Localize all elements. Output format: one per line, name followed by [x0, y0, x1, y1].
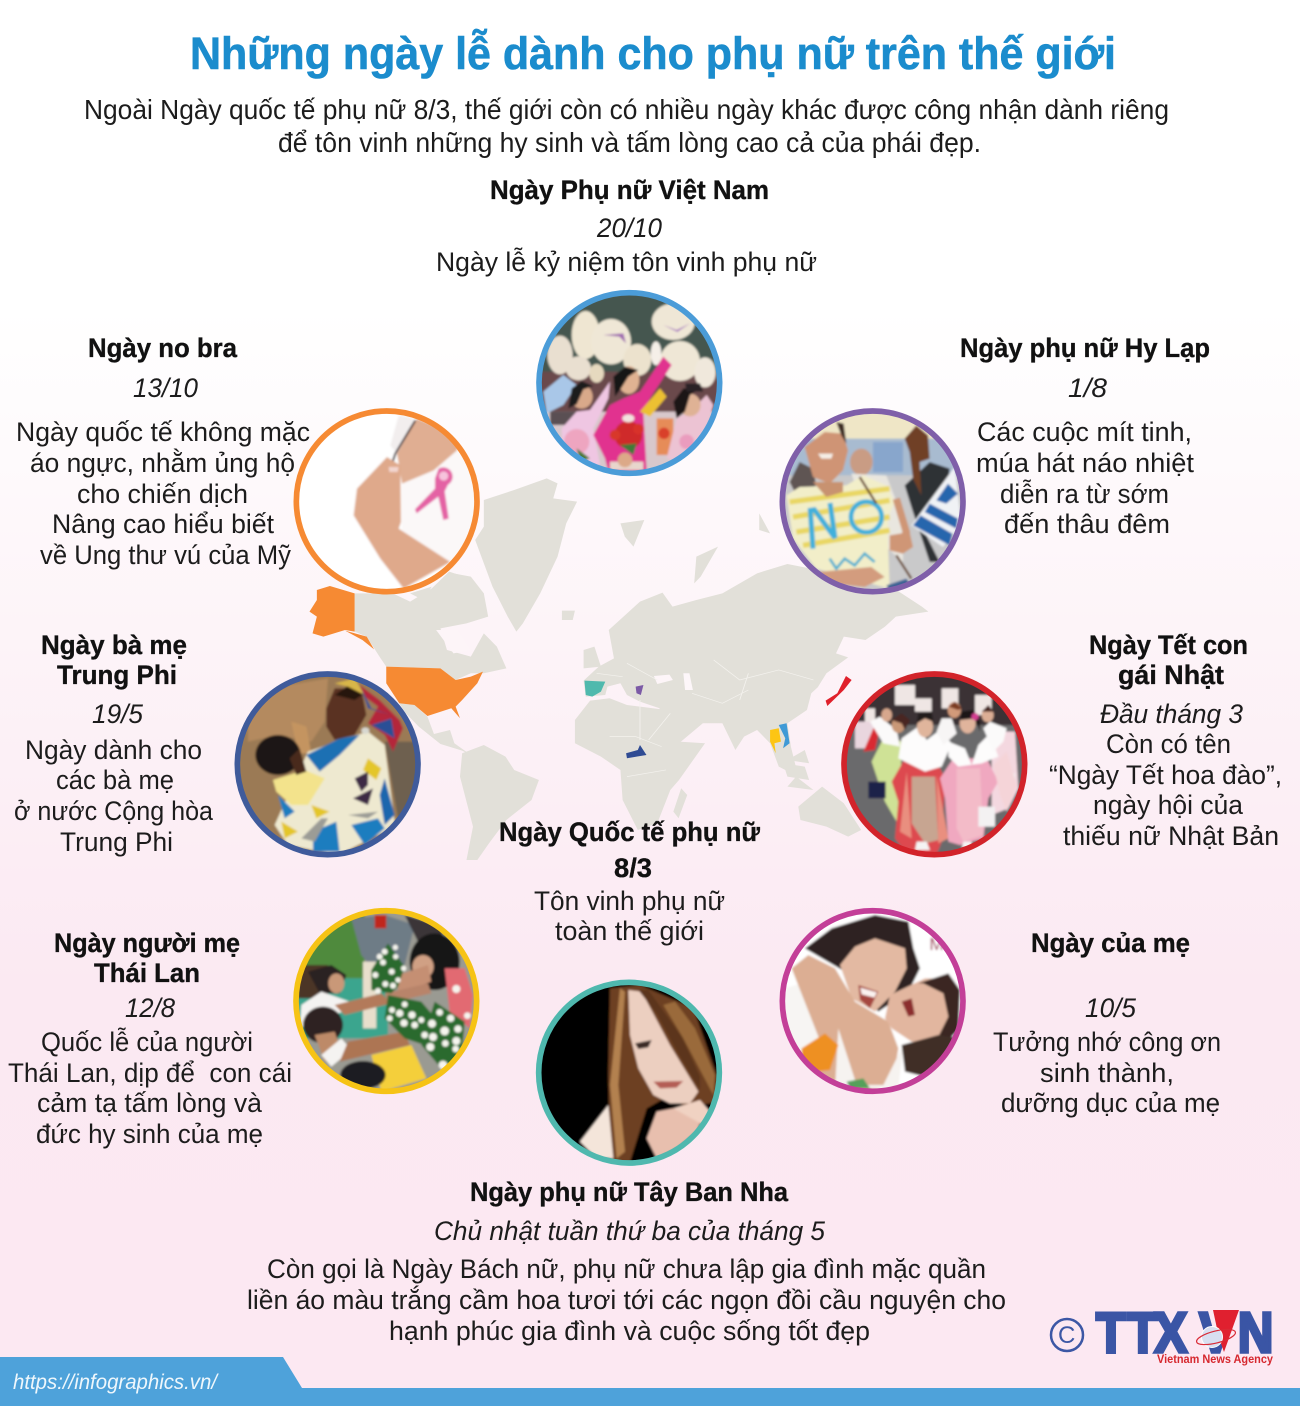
- text: Vietnam: Ngày Phụ nữ Việt Nam: [490, 175, 769, 205]
- text: no bra: về Ung thư vú của Mỹ: [40, 540, 291, 570]
- text: Thailand: Thái Lan, dịp để con cái: [8, 1058, 292, 1088]
- logo: TTXVN: Vietnam News Agency: [1157, 1352, 1273, 1366]
- photo: girl praying: [536, 980, 722, 1166]
- text: Vietnam: [436, 175, 817, 277]
- text: Spain: liền áo màu trắng cầm hoa tươi tới các ngọn đồi cầu nguyện cho: [247, 1284, 1006, 1315]
- text: International Women's Day: 8/3: [614, 853, 652, 883]
- text: Thailand: Thái Lan: [94, 958, 200, 988]
- logo: TTXVN: TTXVN: [1096, 1302, 1273, 1365]
- intro text: để tôn vinh những hy sinh và tấm lòng cao cả của phái đẹp.: [278, 127, 981, 158]
- title: Những ngày lễ dành cho phụ nữ trên thế giới: [190, 28, 1116, 79]
- text: Central Africa: 19/5: [92, 699, 144, 729]
- text: no bra: Ngày quốc tế không mặc: [16, 417, 310, 447]
- text: Greece: Các cuộc mít tinh,: [977, 417, 1192, 447]
- text: Thailand: Ngày người mẹ: [54, 928, 240, 958]
- text: Thailand: cảm tạ tấm lòng và: [37, 1088, 263, 1118]
- text: Greece: diễn ra từ sớm: [1000, 478, 1169, 509]
- text: Greece: múa hát náo nhiệt: [976, 448, 1194, 478]
- text: Central Africa: Ngày dành cho: [25, 735, 202, 765]
- text: Greece: đến thâu đêm: [1004, 509, 1170, 539]
- text: Central Africa: các bà mẹ: [56, 765, 174, 795]
- world map: [309, 478, 928, 860]
- text: no bra: [16, 333, 310, 570]
- highlighted countries: [309, 586, 852, 758]
- photo: Greek woman: [780, 408, 966, 594]
- photo: Vietnam women with conical hats: [536, 290, 722, 476]
- text: Thailand: Quốc lễ của người: [41, 1026, 253, 1057]
- text: Central Africa: Ngày bà mẹ: [41, 630, 187, 660]
- text: Thailand: 12/8: [125, 993, 175, 1023]
- text: Greece: [960, 333, 1210, 539]
- text: Central Africa: [14, 630, 214, 857]
- photo: Central African mother: [234, 671, 421, 858]
- photo: mother and daughter: [780, 908, 966, 1094]
- text: Spain: Còn gọi là Ngày Bách nữ, phụ nữ chưa lập gia đình mặc quần: [267, 1254, 986, 1284]
- text: International Women's Day: [499, 817, 760, 946]
- text: International Women's Day: Tôn vinh phụ nữ: [534, 886, 725, 916]
- logo: TTXVN: C: [1058, 1322, 1075, 1349]
- text: Central Africa: Trung Phi: [57, 660, 177, 690]
- text: Greece: 1/8: [1068, 373, 1107, 403]
- text: Greece: Ngày phụ nữ Hy Lạp: [960, 333, 1210, 363]
- text: International Women's Day: Ngày Quốc tế phụ nữ: [499, 817, 760, 847]
- photo: no bra ribbon: [294, 408, 480, 594]
- text: International Women's Day: toàn thế giới: [555, 916, 704, 946]
- text: Thailand: đức hy sinh của mẹ: [36, 1119, 263, 1149]
- text: Spain: hạnh phúc gia đình và cuộc sống tốt đẹp: [389, 1316, 870, 1346]
- text: no bra: Nâng cao hiểu biết: [52, 509, 274, 539]
- text: Central Africa: ở nước Cộng hòa: [14, 796, 214, 826]
- photo: mother and daughter: M: [929, 934, 944, 954]
- text: Mother's Day: Ngày của mẹ: [1031, 928, 1190, 958]
- text: Vietnam: Ngày lễ kỷ niệm tôn vinh phụ nữ: [436, 246, 817, 277]
- text: Spain: [247, 1177, 1006, 1346]
- text: Japan: Còn có tên: [1106, 729, 1231, 759]
- text: Thailand: [8, 928, 292, 1149]
- footer band: [0, 1357, 1300, 1406]
- text: no bra: áo ngực, nhằm ủng hộ: [30, 447, 295, 478]
- text: Mother's Day: sinh thành,: [1040, 1058, 1174, 1088]
- text: Mother's Day: 10/5: [1085, 993, 1137, 1023]
- text: Japan: “Ngày Tết hoa đào”,: [1049, 760, 1282, 790]
- text: Japan: gái Nhật: [1118, 660, 1224, 690]
- text: Central Africa: Trung Phi: [60, 827, 173, 857]
- footer url: https://infographics.vn/: [13, 1371, 219, 1394]
- text: Japan: [1049, 630, 1282, 851]
- photo: Thai children with flowers: [293, 908, 480, 1094]
- text: no bra: 13/10: [133, 373, 198, 403]
- text: Spain: Ngày phụ nữ Tây Ban Nha: [470, 1177, 789, 1207]
- intro text: Ngoài Ngày quốc tế phụ nữ 8/3, thế giới còn có nhiều ngày khác được công nhận dành riêng: [84, 94, 1169, 125]
- photo: Japanese girls in kimono: [841, 671, 1028, 858]
- text: Mother's Day: Tưởng nhớ công ơn: [993, 1027, 1221, 1057]
- text: Japan: thiếu nữ Nhật Bản: [1063, 821, 1279, 851]
- text: Japan: Ngày Tết con: [1089, 630, 1248, 660]
- text: no bra: cho chiến dịch: [77, 479, 248, 509]
- text: Spain: Chủ nhật tuần thứ ba của tháng 5: [434, 1216, 826, 1246]
- text: Mother's Day: dưỡng dục của mẹ: [1001, 1088, 1220, 1118]
- text: Japan: Đầu tháng 3: [1100, 699, 1243, 729]
- text: no bra: Ngày no bra: [88, 333, 238, 363]
- text: Japan: ngày hội của: [1093, 790, 1244, 820]
- text: Mother's Day: [993, 928, 1221, 1118]
- intro text: [84, 94, 1169, 158]
- text: Vietnam: 20/10: [596, 213, 662, 243]
